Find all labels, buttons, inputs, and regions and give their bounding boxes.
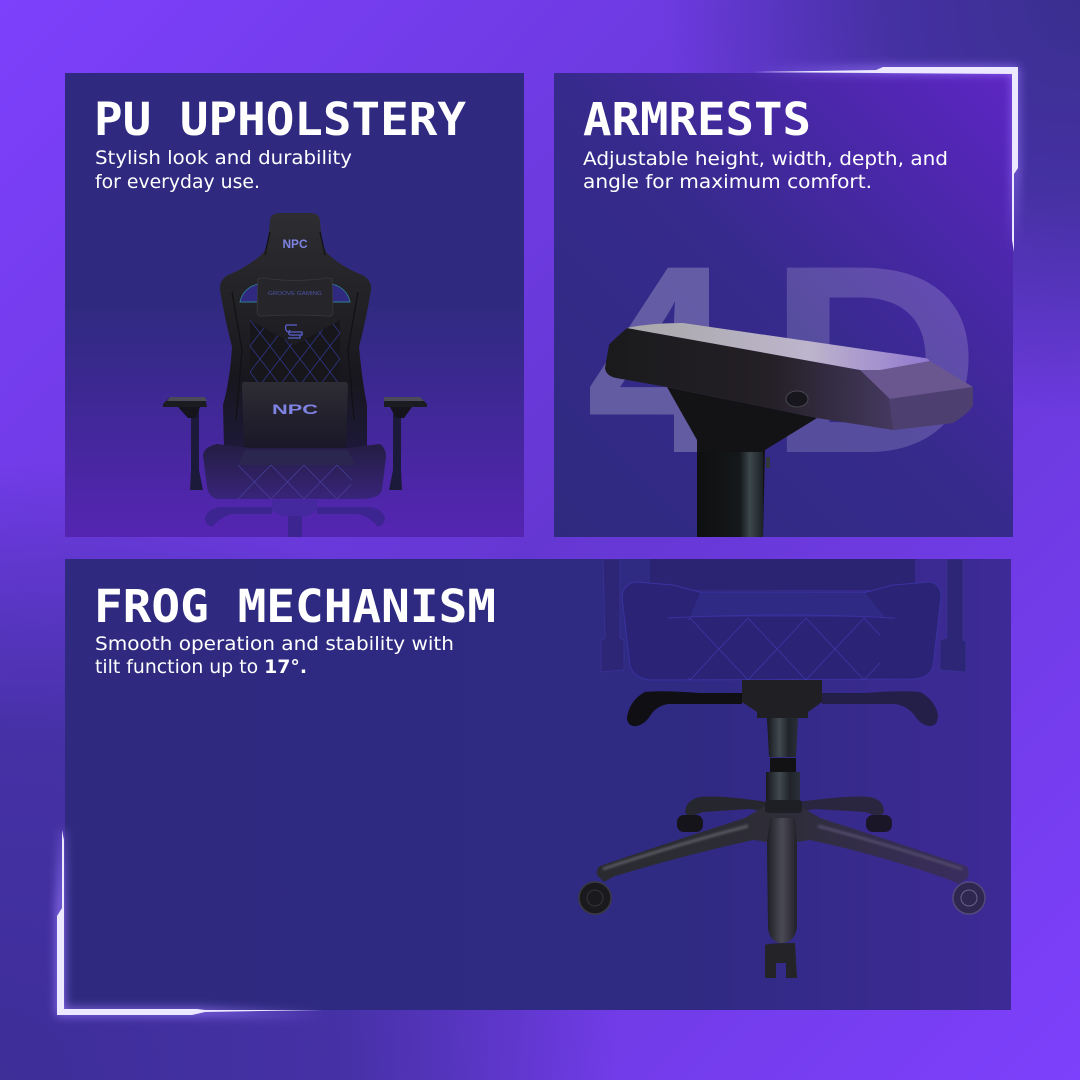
text: armrests description	[583, 148, 948, 193]
chair backrest	[220, 213, 371, 448]
image: full gaming chair	[163, 213, 427, 537]
seat levers	[627, 691, 938, 726]
front star legs	[597, 806, 969, 943]
image: chair base and mechanism	[579, 559, 985, 978]
heading: armrests: ARMRESTS	[583, 93, 811, 146]
groove gaming emblem	[286, 325, 302, 338]
NPC logo on headrest: NPC	[282, 237, 308, 251]
armrest corner facet	[860, 361, 973, 399]
chair seat	[203, 444, 386, 499]
back star legs and casters	[677, 797, 892, 832]
watermark: 4D	[586, 209, 981, 509]
caster: left	[579, 882, 611, 914]
heading: PU upholstery: PU UPHOLSTERY	[94, 93, 466, 146]
text: tilt specification: tilt function up to 17°.	[95, 656, 307, 678]
backrest bolster seams	[232, 232, 358, 420]
glowing frame corner: top right	[753, 67, 1018, 252]
watermark: 4D: 4	[586, 209, 737, 509]
neck pillow: GROOVE GAMING	[268, 291, 322, 297]
text: PU upholstery description	[95, 147, 352, 193]
right leg highlight	[818, 826, 962, 869]
faded seat and back	[601, 559, 966, 680]
heading: frog mechanism: FROG MECHANISM	[94, 580, 496, 633]
glowing frame corner: bottom left	[57, 830, 323, 1015]
caster: front	[765, 943, 797, 978]
text: armrests description: Adjustable height, width, depth, and	[583, 148, 948, 170]
left armrest	[163, 397, 207, 490]
panel: frog mechanism	[65, 559, 1011, 1010]
text: PU upholstery description: Stylish look and durability	[95, 147, 352, 169]
tilt mechanism housing	[742, 680, 822, 718]
armrest pad body	[605, 328, 973, 430]
image: armrest close-up	[605, 323, 973, 538]
neck pillow	[257, 278, 333, 316]
stitched diamond panel	[250, 320, 340, 382]
text: PU upholstery description: for everyday use.	[95, 171, 260, 193]
armrest front corner	[889, 387, 973, 430]
armrest pole	[667, 387, 817, 538]
chair base	[205, 500, 385, 537]
headrest openings	[240, 284, 350, 302]
text: armrests description: angle for maximum comfort.	[583, 171, 872, 193]
caster: right	[953, 882, 985, 914]
watermark: 4D: D	[767, 209, 981, 509]
right armrest	[384, 397, 427, 490]
panel: armrests	[554, 73, 1013, 538]
gas lift column	[766, 718, 800, 805]
front leg highlight	[767, 818, 797, 943]
left leg highlight	[603, 826, 748, 869]
text: frog mechanism description: Smooth operation and stability with	[95, 633, 454, 655]
lumbar pillow: NPC	[272, 401, 318, 417]
column collar	[765, 800, 802, 813]
armrest pad top surface	[627, 323, 929, 370]
adjustment button	[786, 391, 808, 407]
panel: PU upholstery	[65, 73, 524, 537]
lumbar pillow	[242, 382, 348, 448]
